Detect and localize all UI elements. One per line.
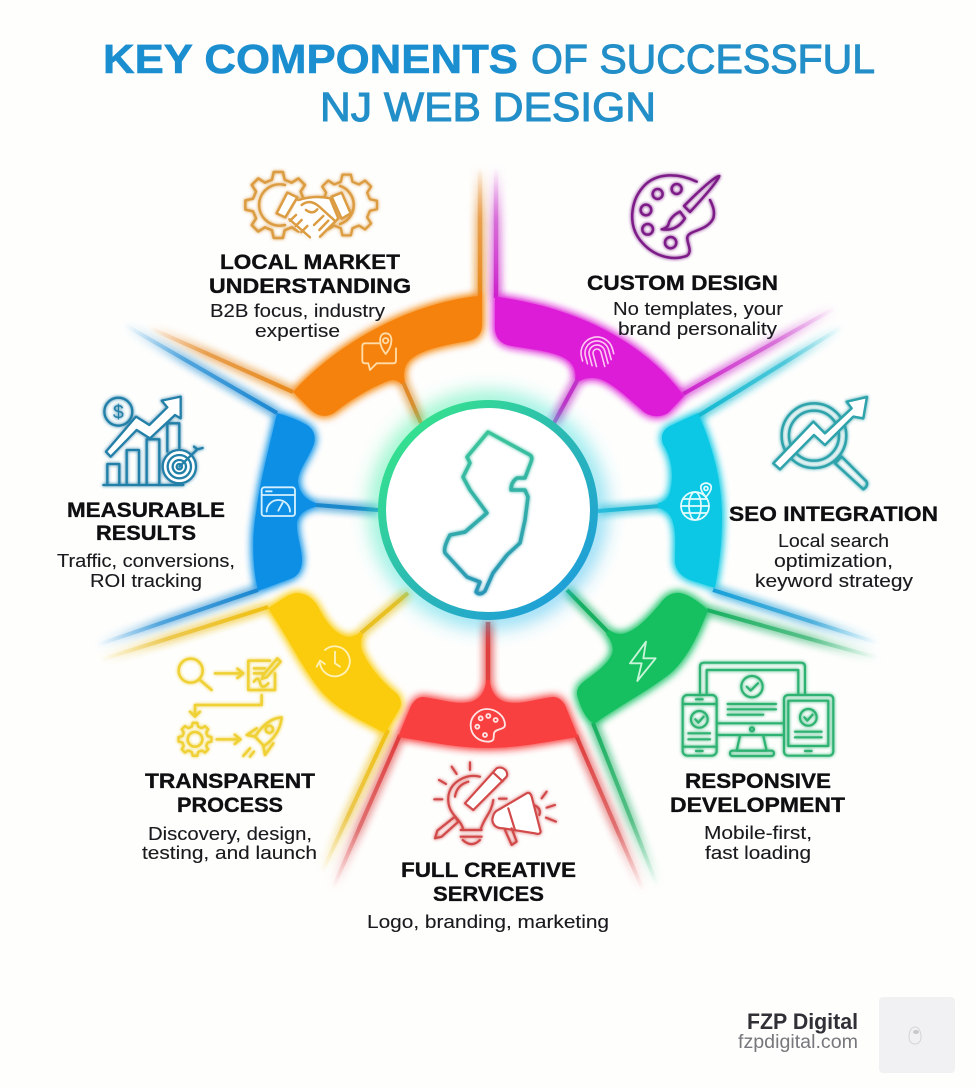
description [210,301,385,341]
description: Mobile-first, [704,823,812,843]
brand footer [738,997,955,1073]
icon: light bulb, pencil and megaphone [434,762,556,845]
wheel segment: blue [97,325,378,645]
logo tile [879,997,955,1073]
description: Logo, branding, marketing [367,912,609,932]
brand footer: fzpdigital.com [738,1032,858,1053]
wheel segment: orange [150,168,482,423]
description [613,299,783,339]
heading: LOCAL MARKET [220,251,400,274]
heading [145,770,315,817]
description: ROI tracking [90,571,202,591]
icon: magnifier with growth arrow [773,397,867,489]
title: KEY COMPONENTS [103,36,518,82]
description: No templates, your [613,299,783,319]
panel: responsive development [567,590,878,885]
description: brand personality [618,319,777,339]
icon: New Jersey outline [445,432,532,594]
icon: growth chart with target [103,397,203,485]
heading: DEVELOPMENT [670,794,845,817]
description: fast loading [705,843,811,863]
title: NJ WEB DESIGN [320,84,656,130]
icon: palette and brush [632,175,719,258]
icon: clock [317,646,350,676]
panel: seo integration [598,327,938,643]
icon: globe with pin [681,483,711,520]
heading: SEO INTEGRATION [729,503,938,526]
title: OF SUCCESSFUL [531,36,875,82]
description: expertise [255,321,340,341]
wheel segment: magenta [495,168,835,423]
icon: small palette [471,709,505,742]
icon: lightning bolt [630,642,656,681]
heading: SERVICES [433,883,544,906]
panel: transparent process [100,593,408,872]
panel: custom design [495,168,835,423]
description: B2B focus, industry [210,301,385,321]
center hub: New Jersey [380,402,596,618]
icon: process flow [178,658,282,757]
heading: TRANSPARENT [145,770,315,793]
wheel segment: green [567,590,878,885]
description: keyword strategy [755,571,913,591]
panel: local market understanding [150,168,482,423]
brand footer: FZP Digital [747,1009,858,1034]
wheel segment: red [333,622,643,890]
description: Local search [778,531,889,551]
description [142,824,317,863]
heading: CUSTOM DESIGN [587,272,778,295]
description: optimization, [774,551,893,571]
heading: MEASURABLE [67,499,225,522]
description [704,823,812,863]
heading [670,770,845,817]
icon: browser gauge [262,487,295,516]
icon: growth chart with target: $ [113,402,124,423]
description: Discovery, design, [148,824,312,844]
description: testing, and launch [142,843,317,863]
heading: PROCESS [177,794,283,817]
heading: RESULTS [96,522,196,545]
icon: responsive devices [683,663,833,756]
panel: full creative services [333,622,643,932]
panel: measurable results [57,325,378,645]
icon: fingerprint [577,333,616,372]
description: Traffic, conversions, [57,551,235,571]
heading [401,859,576,906]
icon: gears and handshake [245,172,377,239]
icon: chat with location pin [362,333,396,370]
heading [67,499,225,545]
heading: RESPONSIVE [685,770,831,793]
heading [209,251,411,298]
heading: FULL CREATIVE [401,859,576,882]
description [57,551,235,591]
heading: UNDERSTANDING [209,275,411,298]
title [103,36,875,130]
wheel segment: cyan [598,327,878,643]
wheel segment: yellow [100,593,408,872]
description [755,531,913,591]
